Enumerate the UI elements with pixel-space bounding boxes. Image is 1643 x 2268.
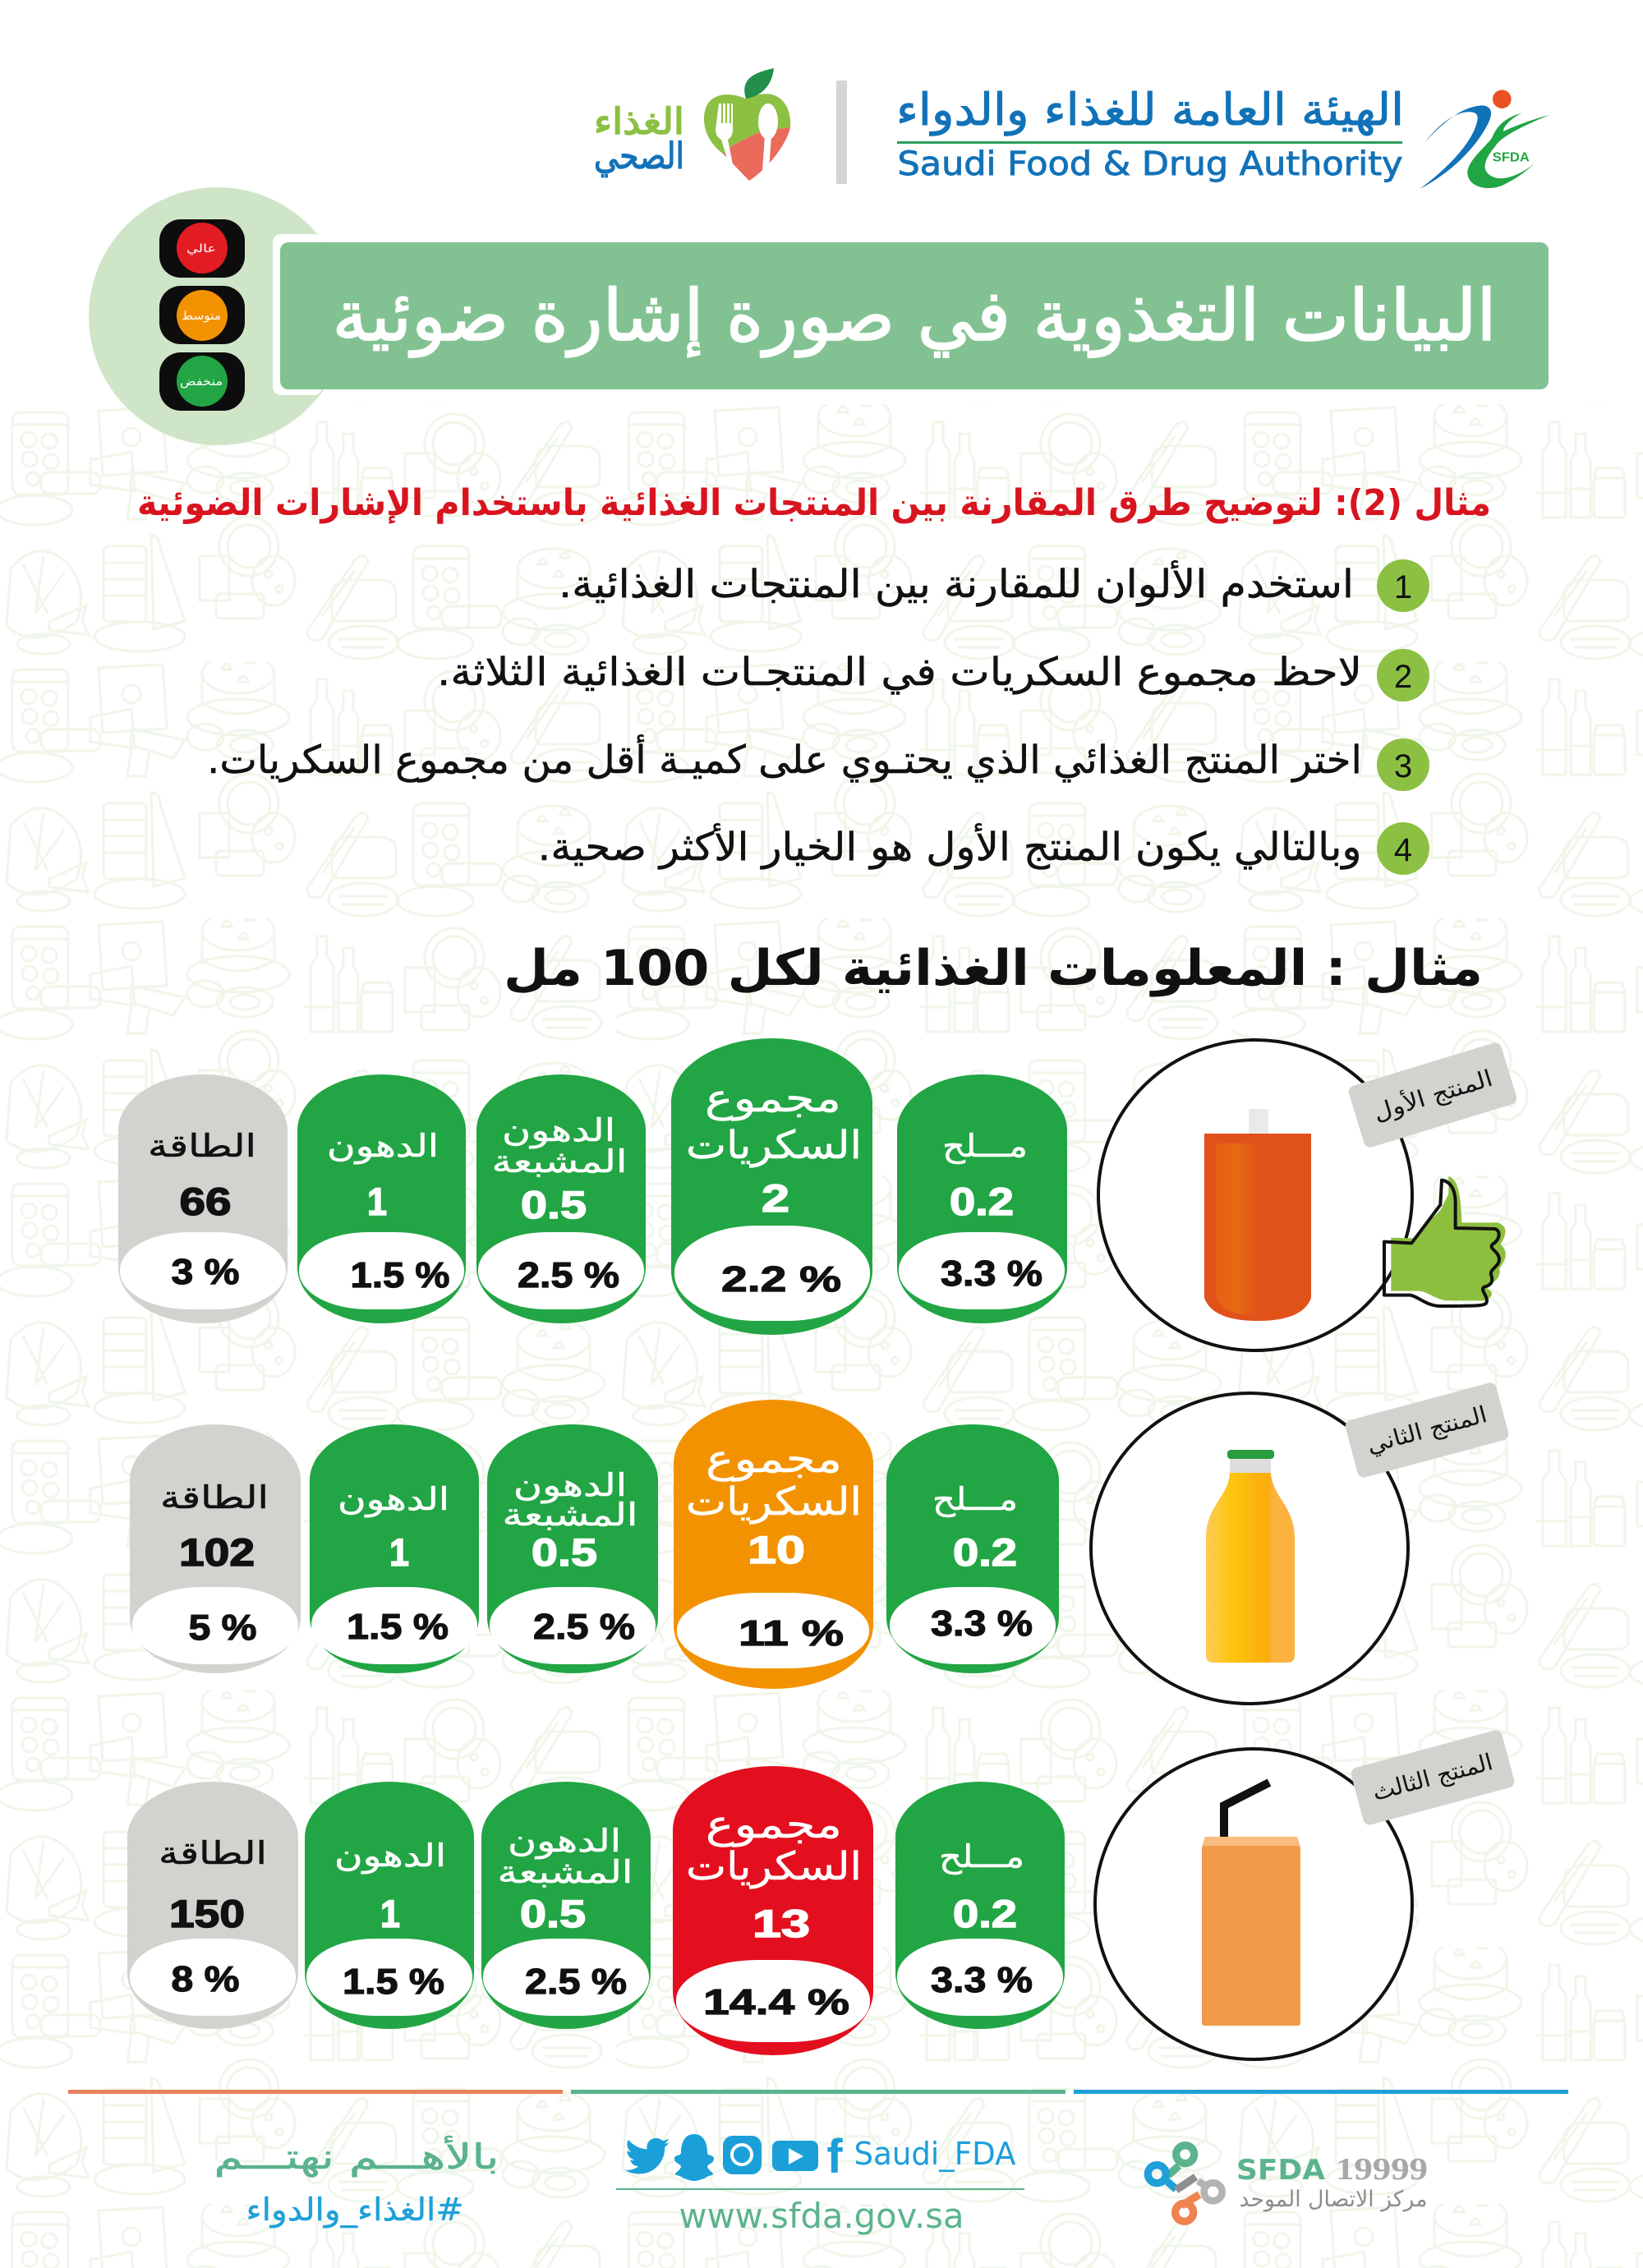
icon: twitter (625, 2138, 670, 2174)
pill: total sugars: مجموع (706, 1802, 842, 1847)
title banner: البيانات التغذوية في صورة إشارة ضوئية (332, 275, 1497, 358)
pill: salt: مـــلح (939, 1838, 1024, 1875)
product circle 2 (1091, 1393, 1408, 1704)
light: medium (159, 286, 245, 344)
logo: Saudi Food & Drug Authority (896, 84, 1549, 189)
tag: third product (1350, 1729, 1516, 1826)
product 3 row (127, 1729, 1516, 2059)
pill: energy (118, 1074, 288, 1323)
pill: saturated fat: 0.5 (532, 1530, 597, 1574)
pill: fat: 1.5 % (347, 1607, 449, 1647)
pill: total sugars: السكريات (686, 1844, 862, 1889)
step 3: اختر المنتج الغذائي الذي يحتـوي على كميـة أقل من مجموع السكريات. (207, 734, 1362, 783)
handle: Saudi_FDA (854, 2136, 1015, 2172)
pill: fat (305, 1782, 474, 2029)
tag: first product: المنتج الأول (1369, 1063, 1496, 1126)
pill: energy: الطاقة (159, 1835, 267, 1871)
pill: total sugars: 2 (762, 1176, 789, 1220)
pill: saturated fat (487, 1424, 658, 1673)
pill: saturated fat: 2.5 % (518, 1255, 619, 1295)
pill: salt: مـــلح (942, 1128, 1028, 1165)
footer: social media (625, 2130, 1015, 2183)
icon: SFDA mark (1420, 90, 1549, 189)
icon: chain logo (1148, 2146, 1222, 2221)
title banner (280, 242, 1549, 389)
pill: fat: 1 (367, 1180, 387, 1223)
pill: fat (310, 1424, 479, 1673)
pill: total sugars: 14.4 % (703, 1982, 849, 2022)
pill: saturated fat: الدهون (502, 1112, 615, 1149)
pill: energy: 150 (169, 1892, 245, 1935)
pill: energy (130, 1424, 301, 1673)
light: low (159, 352, 245, 411)
pill: salt (895, 1782, 1065, 2029)
pill: saturated fat (476, 1074, 646, 1323)
pill: energy: 5 % (189, 1608, 256, 1648)
pill: fat: الدهون (327, 1128, 439, 1165)
step 1: 1 (1394, 569, 1412, 605)
product circle 1 (1098, 1040, 1412, 1350)
pill: energy (127, 1782, 298, 2029)
pill: total sugars: 13 (752, 1902, 810, 1945)
tag: second product: المنتج الثاني (1364, 1401, 1490, 1459)
pill: salt: 3.3 % (931, 1603, 1033, 1644)
example subtitle: مثال (2): لتوضيح طرق المقارنة بين المنتجات الغذائية باستخدام الإشارات الضوئية (137, 482, 1491, 524)
icon: juice box with straw (1202, 1783, 1300, 2026)
pill: salt: 0.2 (953, 1530, 1017, 1574)
pill: energy: 8 % (171, 1959, 240, 1999)
pill: salt (886, 1424, 1059, 1673)
pill: saturated fat: 0.5 (520, 1892, 586, 1935)
logo text: Arabic name: الهيئة العامة للغذاء والدواء (896, 84, 1404, 136)
pill: fat (297, 1074, 466, 1323)
light: low: منخفض (180, 375, 223, 389)
logo text: English name: Saudi Food & Drug Authority (897, 145, 1403, 183)
step 1: استخدم الألوان للمقارنة بين المنتجات الغذائية. (559, 559, 1354, 607)
pill: salt: 0.2 (950, 1180, 1014, 1223)
pill: total sugars: 11 % (739, 1613, 844, 1654)
pill: energy: 3 % (171, 1252, 240, 1292)
footer: website: www.sfda.gov.sa (679, 2196, 964, 2236)
pill: energy: 66 (179, 1180, 232, 1223)
pill: saturated fat: 2.5 % (525, 1962, 627, 2002)
pill: energy: الطاقة (160, 1479, 269, 1516)
pill: salt: 0.2 (953, 1892, 1017, 1935)
pill: energy: الطاقة (148, 1128, 256, 1164)
product circle 3 (1095, 1749, 1412, 2059)
pill: total sugars (674, 1400, 873, 1689)
logo text: healthy food: الصحي (594, 136, 684, 177)
step 4: 4 (1394, 832, 1412, 868)
light: high (159, 219, 245, 278)
pill: saturated fat: الدهون (513, 1467, 627, 1504)
pill: saturated fat: 0.5 (521, 1183, 587, 1226)
call center number (1236, 2152, 1428, 2187)
footer: call center: مركز الاتصال الموحد (1239, 2187, 1428, 2212)
pill: fat: 1.5 % (343, 1962, 444, 2002)
traffic light icon panel (89, 187, 347, 445)
pill: saturated fat (481, 1782, 651, 2029)
icon: pouch (1204, 1109, 1311, 1321)
tag: first product (1347, 1041, 1518, 1149)
product 1 row (118, 1038, 1518, 1350)
pill: salt: 3.3 % (941, 1254, 1042, 1294)
icon: juice bottle (1206, 1450, 1295, 1663)
icon: facebook: f (826, 2130, 843, 2183)
pill: fat: 1 (389, 1530, 409, 1574)
pill: saturated fat: 2.5 % (533, 1607, 635, 1647)
pill: saturated fat: المشبعة (491, 1143, 628, 1180)
pill: total sugars: 2.2 % (721, 1259, 841, 1300)
pill: fat: الدهون (338, 1481, 449, 1518)
pill: fat: الدهون (334, 1838, 446, 1875)
nutrition heading: مثال : المعلومات الغذائية لكل 100 مل (504, 940, 1483, 997)
icon: youtube (772, 2141, 818, 2171)
pill: saturated fat: المشبعة (503, 1497, 637, 1533)
pill: total sugars: السكريات (686, 1479, 862, 1525)
pill: salt: 3.3 % (931, 1960, 1033, 2000)
pill: energy: 102 (179, 1530, 255, 1574)
icon: thumbs up (1384, 1176, 1506, 1306)
step 2: 2 (1394, 659, 1412, 695)
pill: saturated fat: الدهون (508, 1823, 621, 1860)
pill: fat: 1.5 % (350, 1255, 450, 1295)
product 2 row (130, 1382, 1510, 1704)
tag: third product: المنتج الثالث (1369, 1748, 1496, 1806)
footer: slogan (214, 2135, 499, 2229)
light: medium: متوسط (182, 310, 221, 323)
light: high: عالي (186, 242, 216, 255)
logo text: healthy food: الغذاء (594, 101, 684, 143)
pill: total sugars: السكريات (686, 1123, 862, 1168)
step list (207, 559, 1429, 875)
icon: SFDA mark: SFDA (1493, 151, 1530, 165)
pill: total sugars: مجموع (706, 1437, 842, 1482)
logo text: healthy food (594, 101, 684, 177)
step 2: لاحظ مجموع السكريات في المنتجـات الغذائية الثلاثة. (437, 650, 1362, 695)
call center number: SFDA (1236, 2154, 1326, 2187)
footer: slogan: #الغذاء_والدواء (246, 2192, 463, 2229)
icon: snapchat (674, 2134, 714, 2181)
logo: healthy food apple (594, 68, 790, 181)
pill: total sugars (671, 1038, 872, 1335)
pill: fat: 1 (380, 1892, 400, 1935)
step 4: وبالتالي يكون المنتج الأول هو الخيار الأكثر صحية. (537, 822, 1362, 870)
pill: salt (897, 1074, 1067, 1323)
tag: second product (1344, 1382, 1510, 1479)
footer: call center (1148, 2146, 1428, 2221)
footer: slogan: بالأهـــم نهتـــم (214, 2135, 499, 2178)
pill: salt: مـــلح (932, 1481, 1018, 1518)
icon: instagram (723, 2136, 762, 2174)
pill: total sugars: مجموع (705, 1076, 841, 1121)
pill: total sugars (673, 1766, 873, 2055)
pill: saturated fat: المشبعة (498, 1854, 633, 1890)
pill: total sugars: 10 (748, 1528, 805, 1571)
step 3: 3 (1394, 748, 1412, 784)
call center number: 19999 (1336, 2152, 1428, 2187)
